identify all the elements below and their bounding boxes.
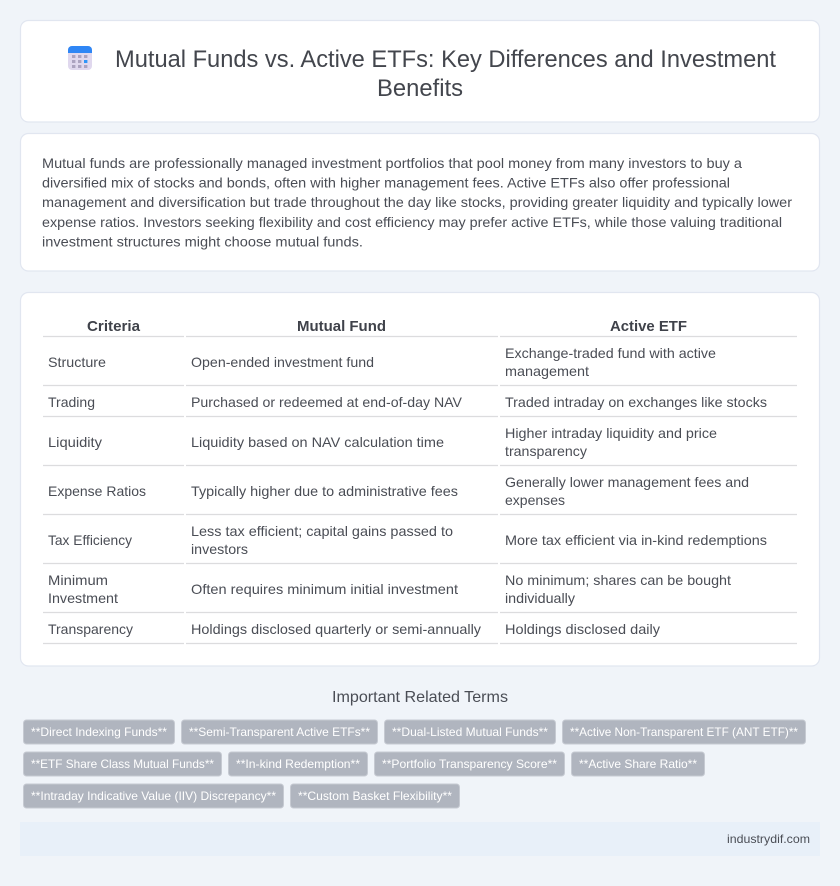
row: structure: management [505, 363, 589, 379]
panel: introduction [20, 134, 820, 271]
row: trading: Trading [48, 394, 95, 410]
row: transparency: Holdings disclosed daily [505, 621, 660, 637]
text block: introduction paragraph: management and diversification but trade throughout the day like stocks, providing greater liquidity and typically lower [42, 194, 792, 210]
table row lines [43, 336, 797, 644]
tag: active share ratio: **Active Share Ratio** [579, 757, 697, 771]
icon: calendar [68, 46, 92, 70]
text block: introduction paragraph: investment structures might choose mutual funds. [42, 233, 363, 249]
row: tax efficiency [48, 523, 767, 557]
title [115, 46, 776, 102]
row: structure: Open-ended investment fund [191, 354, 374, 370]
row: liquidity: transparency [505, 443, 587, 459]
row: liquidity [48, 425, 717, 459]
row: transparency: Transparency [48, 621, 133, 637]
heading: important related terms: Important Related Terms [332, 689, 508, 706]
tag: direct indexing funds [24, 720, 174, 744]
tag: dual-listed mutual funds: **Dual-Listed Mutual Funds** [392, 725, 548, 739]
tag: active non-transparent etf: **Active Non-Transparent ETF (ANT ETF)** [570, 725, 798, 739]
table header row: Criteria [87, 318, 141, 335]
row: structure: Exchange-traded fund with active [505, 345, 716, 361]
row: trading: Purchased or redeemed at end-of-day NAV [191, 394, 463, 410]
tag: portfolio transparency score: **Portfolio Transparency Score** [382, 757, 557, 771]
tag: dual-listed mutual funds [384, 720, 556, 744]
row: expense ratios: Expense Ratios [48, 483, 146, 499]
panel: header [20, 20, 820, 122]
tag: etf share class mutual funds: **ETF Share Class Mutual Funds** [31, 757, 214, 771]
row: liquidity: Liquidity based on NAV calculation time [191, 434, 444, 450]
row: minimum investment: No minimum; shares can be bought [505, 572, 731, 588]
row: structure [48, 345, 716, 379]
row: liquidity: Higher intraday liquidity and price [505, 425, 717, 441]
table header row: Mutual Fund [297, 318, 386, 335]
table header row [87, 318, 687, 335]
text block: introduction paragraph: Mutual funds are professionally managed investment portfolios that pool money from many investors to buy a [42, 155, 742, 171]
title: Benefits [377, 75, 463, 102]
tag: etf share class mutual funds [24, 752, 222, 776]
row: transparency [48, 621, 660, 637]
tag: active share ratio [572, 752, 704, 776]
tag: direct indexing funds: **Direct Indexing Funds** [31, 725, 167, 739]
tag: intraday indicative value discrepancy [24, 784, 284, 808]
tag: semi-transparent active etfs: **Semi-Transparent Active ETFs** [189, 725, 370, 739]
text block: introduction paragraph: expense ratios. Investors seeking flexibility and cost efficiency may prefer active ETFs, while those valuing traditional [42, 214, 782, 230]
row: tax efficiency: Less tax efficient; capital gains passed to [191, 523, 453, 539]
row: minimum investment: individually [505, 590, 575, 606]
panel: related term tags [24, 720, 806, 808]
footer [20, 822, 820, 856]
row: tax efficiency: investors [191, 541, 248, 557]
tag: custom basket flexibility [290, 784, 460, 808]
row: expense ratios: Generally lower management fees and [505, 474, 749, 490]
row: structure: Structure [48, 354, 106, 370]
title: Mutual Funds vs. Active ETFs: Key Differences and Investment [115, 46, 776, 73]
row: expense ratios: expenses [505, 492, 565, 508]
row: minimum investment: Often requires minimum initial investment [191, 581, 458, 597]
tag: custom basket flexibility: **Custom Basket Flexibility** [298, 789, 452, 803]
row: liquidity: Liquidity [48, 434, 102, 450]
text block: introduction paragraph: diversified mix of stocks and bonds, often with higher management fees. Active ETFs also offer professional [42, 175, 730, 191]
tag: semi-transparent active etfs [182, 720, 378, 744]
row: tax efficiency: Tax Efficiency [48, 532, 132, 548]
tag: in-kind redemption: **In-kind Redemption** [236, 757, 360, 771]
footer: industrydif.com [727, 832, 810, 846]
row: transparency: Holdings disclosed quarterly or semi-annually [191, 621, 481, 637]
row: expense ratios [48, 474, 749, 508]
row: minimum investment [48, 572, 731, 606]
text block: introduction paragraph [42, 155, 792, 249]
panel: comparison table [20, 292, 820, 666]
row: expense ratios: Typically higher due to administrative fees [191, 483, 458, 499]
table header row: Active ETF [610, 318, 687, 335]
row: trading [48, 394, 767, 410]
row: minimum investment: Minimum [48, 572, 108, 588]
tag: portfolio transparency score [374, 752, 564, 776]
row: tax efficiency: More tax efficient via in-kind redemptions [505, 532, 767, 548]
tag: intraday indicative value discrepancy: **Intraday Indicative Value (IIV) Discrepancy** [31, 789, 276, 803]
row: trading: Traded intraday on exchanges like stocks [505, 394, 767, 410]
tag: in-kind redemption [228, 752, 368, 776]
row: minimum investment: Investment [48, 590, 118, 606]
tag: active non-transparent etf [562, 720, 806, 744]
